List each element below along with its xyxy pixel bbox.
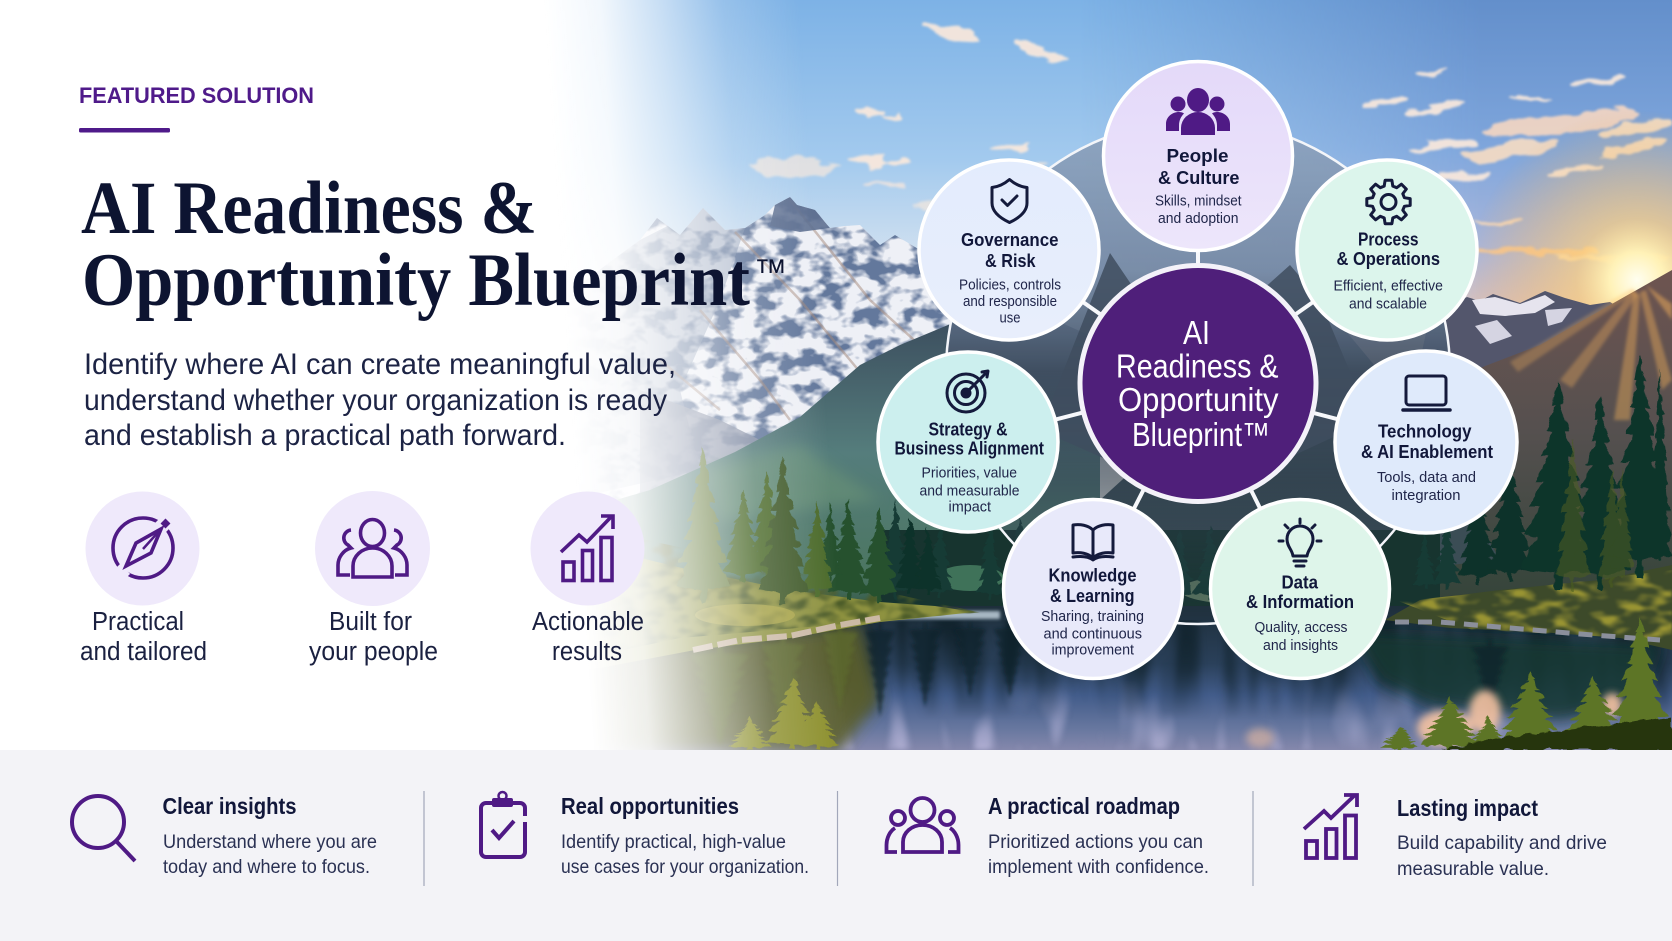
node: strategy and business alignment [878,352,1058,532]
icon: gear [1367,180,1410,224]
center hub: Readiness & [1116,348,1278,386]
main title: ™ [754,251,787,292]
node: people and culture: and adoption [1158,211,1238,227]
icon: light bulb [1279,519,1321,566]
node: data and information [1210,500,1390,678]
main snow-capped peak [607,197,950,498]
node: process and operations [1297,160,1477,340]
sun rays [1510,285,1672,420]
benefit: clear insights: today and where to focus. [163,856,370,878]
benefit: lasting impact: Lasting impact [1397,795,1538,821]
spokes [968,156,1426,589]
icon: team outline [886,798,958,852]
icon: target with arrow [947,371,988,412]
icon: rising bar chart [1304,795,1357,858]
feature: practical and tailored: Practical [92,608,184,636]
node: process and operations: & Operations [1336,248,1440,269]
intro paragraph: and establish a practical path forward. [84,419,566,452]
icon: people group solid [1166,88,1230,135]
node: people and culture: People [1166,145,1228,166]
right shore with rocks [1385,565,1672,650]
conifer forest [676,354,1672,605]
left sunlit shore [480,530,980,680]
center hub: AI [1183,315,1210,352]
center hub: Opportunity [1118,382,1279,419]
benefit: lasting impact [1304,795,1607,880]
main title: Opportunity Blueprint [82,239,750,322]
icon: magnifier [72,796,135,861]
node: technology and AI enablement: Tools, data and [1377,470,1476,486]
bottom benefits band [0,750,1672,941]
central and right valley hillsides [880,300,1500,630]
node: knowledge and learning: Knowledge [1048,564,1136,586]
node: strategy and business alignment: Strategy & [928,418,1008,440]
node: technology and AI enablement: Technology [1378,420,1472,442]
node: people and culture: & Culture [1158,167,1240,188]
lake reflections [560,611,1660,750]
benefit: a practical roadmap: implement with confidence. [988,856,1209,878]
main title [81,167,787,322]
benefit: lasting impact: Build capability and drive [1397,832,1607,854]
feature: actionable results: results [552,638,622,666]
lake [400,606,1672,750]
intro paragraph: understand whether your organization is ready [84,384,667,417]
intro paragraph: Identify where AI can create meaningful value, [84,348,676,381]
benefit: a practical roadmap: A practical roadmap [988,793,1180,819]
icon: clipboard with check [481,792,525,857]
node: governance and risk: & Risk [985,250,1036,271]
node: knowledge and learning: and continuous [1044,626,1142,642]
node: technology and AI enablement: & AI Enablement [1361,441,1493,462]
node: strategy and business alignment: Business Alignment [894,438,1044,458]
sky [580,0,1672,498]
node: data and information: Data [1282,572,1319,592]
framework diagram [878,62,1517,678]
right sunlit hillside [1380,270,1672,630]
node: governance and risk: and responsible [963,294,1057,310]
sun glow [1467,110,1672,450]
icon: laptop [1403,376,1450,410]
white fade over the left of the photo [0,0,1000,750]
icon: growth chart [561,516,613,580]
icon: group of people outline [338,520,407,577]
node: technology and AI enablement: integration [1392,488,1460,504]
feature: built for your people [309,491,438,666]
node: knowledge and learning [1004,500,1182,678]
feature: built for your people: your people [309,638,438,666]
green foothill slope [480,300,1100,640]
node: data and information: Quality, access [1254,620,1348,636]
node: data and information: and insights [1263,638,1338,654]
benefit: real opportunities: Identify practical, high-value [561,831,786,853]
benefit: real opportunities [481,792,809,878]
accent rule [79,128,170,132]
feature: practical and tailored: and tailored [80,638,207,666]
node: process and operations: and scalable [1349,296,1427,312]
icon: open book [1073,525,1113,560]
node: process and operations: Process [1358,228,1418,250]
node: governance and risk: Policies, controls [959,278,1061,294]
center hub [1080,266,1316,502]
benefit: clear insights: Understand where you are [163,831,377,853]
foreground young firs [728,616,1672,750]
feature: actionable results [530,492,644,666]
node: knowledge and learning: Sharing, training [1041,609,1144,625]
node: knowledge and learning: & Learning [1050,585,1134,606]
node: governance and risk [919,160,1099,340]
icon: compass [113,518,173,578]
benefit: clear insights [72,793,377,878]
icon: shield with check [992,180,1027,222]
node: process and operations: Efficient, effective [1334,278,1443,294]
node: data and information: & Information [1246,591,1354,612]
far right snowy mountains [1420,291,1640,372]
main title: AI Readiness & [81,167,537,250]
node: strategy and business alignment: Priorities, value [922,466,1017,482]
benefit: real opportunities: use cases for your organization. [561,856,809,878]
background: mountain lake landscape at sunrise [580,0,1672,750]
feature: practical and tailored [80,492,207,666]
node: governance and risk: Governance [961,229,1058,250]
node: governance and risk: use [1000,310,1020,326]
node: people and culture: Skills, mindset [1155,194,1242,210]
benefit: real opportunities: Real opportunities [561,793,739,819]
eyebrow: featured solution: FEATURED SOLUTION [79,83,314,108]
feature: actionable results: Actionable [532,608,644,636]
benefit: a practical roadmap: Prioritized actions you can [988,831,1203,853]
outer ring [946,120,1450,624]
node: knowledge and learning: improvement [1052,642,1134,658]
center hub: Blueprint™ [1132,417,1270,454]
intro paragraph [84,348,676,452]
node: strategy and business alignment: impact [948,500,991,516]
node: technology and AI enablement [1335,351,1517,533]
node: people and culture [1104,62,1292,250]
node: strategy and business alignment: and measurable [920,484,1020,500]
benefit: clear insights: Clear insights [162,793,296,819]
clouds [749,19,1672,261]
benefit: lasting impact: measurable value. [1397,858,1549,880]
benefit: a practical roadmap [886,793,1209,878]
feature: built for your people: Built for [329,608,412,636]
